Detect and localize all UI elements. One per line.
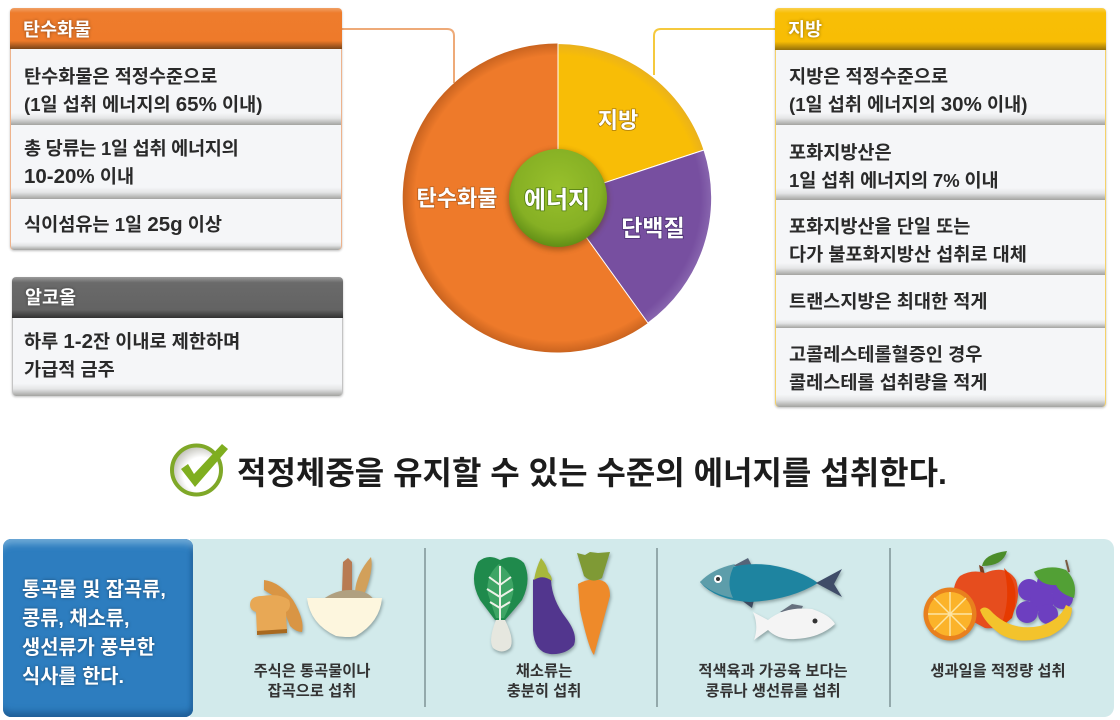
- connector: carbohydrate panel to pie: [342, 28, 455, 83]
- text: fat limit: (1일 섭취 에너지의 30% 이내): [789, 92, 1027, 116]
- text: total sugars: [10, 125, 342, 199]
- text: dietary fibre: 식이섬유는 1일 25g 이상: [24, 213, 222, 236]
- text: cholesterol: 콜레스테롤 섭취량을 적게: [789, 372, 988, 392]
- heading: alcohol: 알코올: [25, 287, 76, 308]
- panel: diet recommendation: 통곡물 및 잡곡류,: [22, 579, 166, 601]
- text: dietary fibre: [10, 199, 342, 250]
- text: alcohol limit: [12, 318, 343, 396]
- text: vegetables caption: 충분히 섭취: [507, 683, 581, 700]
- panel: fat: [775, 8, 1106, 407]
- divider: [424, 548, 426, 707]
- text: grains caption: [254, 662, 370, 700]
- heading: alcohol: [12, 277, 343, 318]
- text: cholesterol: 고콜레스테롤혈증인 경우: [789, 344, 982, 365]
- panel: diet recommendation: 생선류가 풍부한: [22, 637, 155, 659]
- text: replace saturated fat: [775, 200, 1106, 275]
- centre circle: energy: [509, 149, 607, 247]
- heading: carbohydrate: [10, 8, 342, 49]
- icon: vegetables: [473, 552, 613, 658]
- text: protein foods caption: 콩류나 생선류를 섭취: [705, 683, 841, 700]
- text: saturated fat: 1일 섭취 에너지의 7% 이내: [789, 170, 998, 190]
- text: trans fat: [775, 275, 1106, 328]
- text: total sugars: 10-20% 이내: [24, 164, 134, 188]
- text: saturated fat: [775, 125, 1106, 200]
- label: energy: 에너지: [524, 187, 590, 214]
- text: trans fat: 트랜스지방은 최대한 적게: [789, 291, 988, 312]
- slice: carbohydrate: [403, 43, 648, 352]
- text: protein foods caption: 적색육과 가공육 보다는: [698, 663, 848, 680]
- icon: check mark: [170, 444, 228, 496]
- divider: [889, 548, 891, 707]
- label: carbohydrate: 탄수화물: [417, 186, 497, 211]
- text: fruit caption: 생과일을 적정량 섭취: [930, 663, 1066, 680]
- icon: fruits: [922, 551, 1078, 644]
- panel: carbohydrate: [10, 8, 342, 250]
- text: carbohydrate limit: (1일 섭취 에너지의 65% 이내): [24, 92, 262, 116]
- text: carbohydrate limit: [10, 49, 342, 125]
- text: key message: 적정체중을 유지할 수 있는 수준의 에너지를 섭취한다.: [237, 455, 947, 491]
- slice: fat: [558, 44, 704, 198]
- pie chart: energy sources: [402, 44, 712, 352]
- text: replace saturated fat: 다가 불포화지방산 섭취로 대체: [789, 244, 1027, 264]
- text: carbohydrate limit: 탄수화물은 적정수준으로: [24, 66, 217, 87]
- grapes: [1016, 572, 1073, 624]
- panel: diet recommendation: [3, 539, 193, 717]
- panel: diet recommendation: 콩류, 채소류,: [22, 608, 129, 630]
- icon: fish: [700, 558, 844, 643]
- text: fat limit: 지방은 적정수준으로: [789, 66, 948, 87]
- text: total sugars: 총 당류는 1일 섭취 에너지의: [24, 138, 238, 159]
- icon: bread and grain bowl: [249, 557, 384, 641]
- divider: [656, 548, 658, 707]
- text: cholesterol: [775, 328, 1106, 407]
- panel: alcohol: [12, 277, 343, 396]
- text: alcohol limit: 하루 1-2잔 이내로 제한하며: [24, 330, 240, 353]
- text: fat limit: [775, 50, 1106, 125]
- label: protein: 단백질: [621, 215, 685, 241]
- heading: fat: 지방: [788, 19, 822, 40]
- heading: fat: [775, 8, 1106, 50]
- heading: carbohydrate: 탄수화물: [23, 19, 91, 40]
- label: fat: 지방: [598, 108, 638, 133]
- text: protein foods caption: [698, 662, 848, 700]
- text: grains caption: 잡곡으로 섭취: [268, 683, 356, 700]
- text: grains caption: 주식은 통곡물이나: [254, 663, 370, 680]
- panel: diet recommendation: 식사를 한다.: [22, 666, 124, 688]
- text: replace saturated fat: 포화지방산을 단일 또는: [789, 216, 970, 237]
- panel: diet band: [190, 539, 1114, 717]
- text: saturated fat: 포화지방산은: [789, 142, 892, 163]
- slice: protein: [558, 150, 712, 323]
- text: vegetables caption: [507, 663, 581, 700]
- connector: fat panel to pie: [653, 28, 775, 75]
- text: vegetables caption: 채소류는: [516, 663, 572, 680]
- text: alcohol limit: 가급적 금주: [24, 358, 115, 380]
- key message with check icon: [170, 444, 947, 496]
